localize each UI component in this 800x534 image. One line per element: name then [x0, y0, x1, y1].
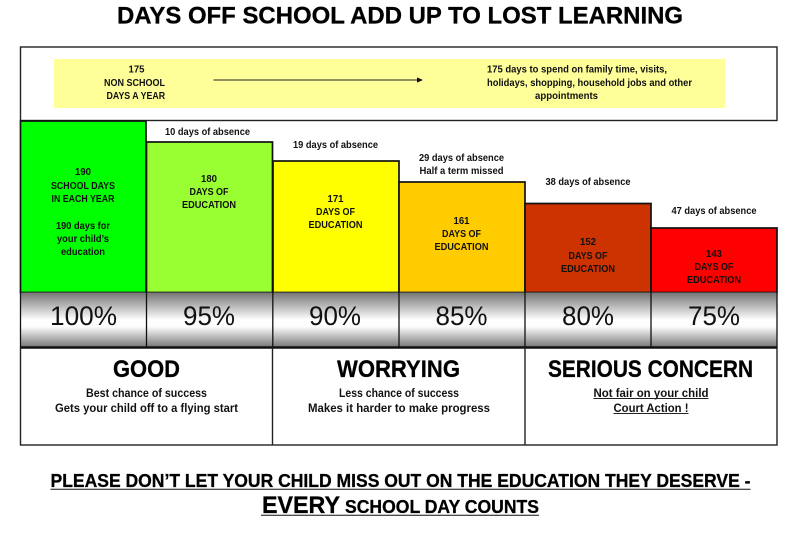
- percentage band: 95%: [183, 301, 235, 331]
- bar: 80%: 152: [580, 237, 596, 248]
- non school days description: appointments: [535, 91, 598, 102]
- verdict: good: Gets your child off to a flying start: [55, 402, 238, 415]
- verdict: worrying: Makes it harder to make progress: [308, 402, 490, 415]
- bar: 75%: EDUCATION: [687, 275, 741, 286]
- absence labels: Half a term missed: [420, 166, 504, 177]
- verdict: serious concern: [548, 356, 753, 415]
- bar: 90%: DAYS OF: [316, 207, 355, 218]
- verdict: good: [55, 356, 238, 415]
- verdict: good: Best chance of success: [86, 387, 207, 400]
- panel: non school days: [20, 47, 777, 120]
- verdict: worrying: Less chance of success: [339, 387, 459, 400]
- bar: 100%: your child’s: [57, 234, 109, 245]
- yellow strip: [54, 59, 725, 108]
- percentage band: 85%: [436, 301, 488, 331]
- bar: 95%: 180: [201, 174, 217, 185]
- bar: 85%: 161: [454, 216, 470, 227]
- bar: 90%: EDUCATION: [308, 220, 362, 231]
- bar: 80%: DAYS OF: [568, 251, 608, 262]
- closing message: [50, 470, 750, 519]
- bar: 100%: IN EACH YEAR: [52, 194, 115, 205]
- absence labels: 38 days of absence: [546, 177, 631, 188]
- non school days description: [487, 64, 692, 102]
- bar: 85%: [399, 182, 525, 292]
- percentage band: 80%: [562, 301, 614, 331]
- bar chart: [20, 121, 777, 292]
- bar: 100%: [20, 121, 146, 292]
- verdict: serious concern: Not fair on your child: [594, 387, 708, 400]
- bar: 85%: EDUCATION: [434, 242, 488, 253]
- bar: 95%: [146, 142, 272, 292]
- bar: 75%: DAYS OF: [694, 262, 734, 273]
- non school days text: DAYS A YEAR: [107, 91, 165, 102]
- bar: 90%: 171: [328, 194, 344, 205]
- bar: 95%: EDUCATION: [182, 200, 236, 211]
- verdict: worrying: WORRYING: [337, 356, 460, 383]
- absence labels: 19 days of absence: [293, 140, 378, 151]
- bar: 85%: DAYS OF: [442, 229, 481, 240]
- bar: 75%: 143: [706, 249, 722, 260]
- closing message: EVERY: [262, 492, 340, 519]
- percentage band: 75%: [688, 301, 740, 331]
- bar: 75%: [651, 228, 777, 292]
- verdict: worrying: [308, 356, 490, 415]
- absence labels: [165, 127, 757, 217]
- absence labels: 29 days of absence: [419, 153, 504, 164]
- bar: 90%: [273, 161, 399, 292]
- closing message: PLEASE DON’T LET YOUR CHILD MISS OUT ON THE EDUCATION THEY DESERVE -: [50, 470, 750, 491]
- percentage band: 100%: [50, 301, 117, 331]
- absence labels: 10 days of absence: [165, 127, 250, 138]
- absence labels: 47 days of absence: [672, 206, 757, 217]
- bar: 95%: DAYS OF: [190, 187, 228, 198]
- non school days text: 175: [128, 64, 145, 76]
- panel: verdicts: [20, 348, 777, 445]
- bar: 80%: EDUCATION: [561, 264, 615, 275]
- percentage band: 90%: [309, 301, 361, 331]
- non school days text: [104, 64, 166, 102]
- verdict: serious concern: Court Action !: [614, 402, 688, 415]
- closing message: SCHOOL DAY COUNTS: [345, 497, 539, 517]
- verdict: serious concern: SERIOUS CONCERN: [548, 356, 753, 383]
- bar: 100%: 190 days for: [56, 221, 110, 232]
- non school days description: 175 days to spend on family time, visits,: [487, 64, 667, 76]
- bar: 80%: [525, 204, 651, 292]
- non school days description: holidays, shopping, household jobs and other: [487, 78, 692, 89]
- bar: 100%: education: [61, 247, 105, 258]
- verdict: good: GOOD: [113, 356, 180, 383]
- percentage band: [20, 292, 777, 348]
- arrow: [214, 77, 423, 83]
- bar: 100%: 190: [75, 167, 91, 178]
- non school days text: NON SCHOOL: [104, 78, 166, 89]
- title: DAYS OFF SCHOOL ADD UP TO LOST LEARNING: [117, 2, 683, 30]
- bar: 100%: SCHOOL DAYS: [51, 181, 115, 192]
